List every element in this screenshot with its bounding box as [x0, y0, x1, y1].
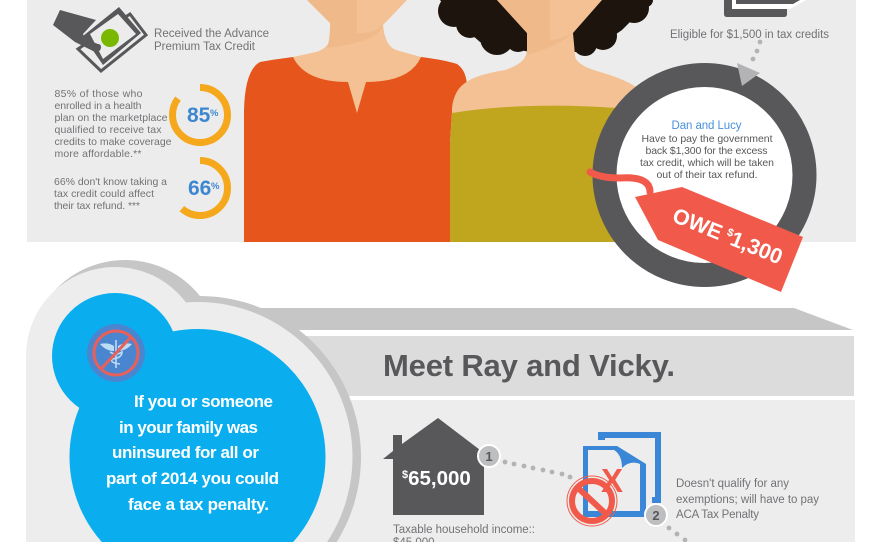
icon: rejected document: X — [601, 462, 623, 499]
panel: Dan and Lucy — [27, 0, 856, 242]
chart: 85 percent donut: % — [210, 108, 219, 119]
step 2 marker: 2 — [652, 508, 660, 523]
icon: house with income: 65,000 — [408, 467, 471, 490]
icon: house with income: $ — [402, 469, 408, 481]
text: 66 percent explanation: their tax refund. *** — [54, 200, 140, 212]
arrow: dotted connector to document — [503, 460, 572, 479]
text: 85 percent explanation: plan on the marketplace — [54, 112, 168, 124]
text: 85 percent explanation: credits to make coverage — [54, 136, 172, 148]
illustration: Lucy — [438, 0, 653, 242]
chart: 85 percent donut: 85 — [187, 104, 211, 127]
ring: amount owed — [604, 75, 804, 275]
tag: owe amount: $ — [725, 226, 735, 240]
text: penalty statement: face a tax penalty. — [128, 495, 269, 514]
text: 85 percent explanation — [54, 88, 172, 160]
text: Dan and Lucy callout — [640, 120, 774, 181]
panel: Ray and Vicky — [27, 400, 855, 542]
text: taxable income — [393, 524, 535, 542]
text: 66 percent explanation: 66% don't know taking a — [54, 176, 167, 188]
text: 85 percent explanation: enrolled in a health — [54, 100, 142, 112]
callout: uninsured penalty — [26, 260, 361, 542]
step 2 marker — [645, 504, 667, 526]
text: penalty statement: If you or someone — [134, 392, 273, 411]
banner: heading background — [280, 336, 854, 396]
icon: no medical insurance — [87, 324, 145, 382]
text: received credit — [154, 28, 269, 53]
chart: 66 percent donut: 66 — [188, 177, 211, 200]
text: Dan and Lucy callout: tax credit, which will be taken — [640, 157, 774, 169]
chart: 66 percent donut: % — [211, 181, 220, 192]
icon: document tray — [724, 0, 806, 17]
text: penalty statement: in your family was — [119, 418, 258, 437]
text: Dan and Lucy callout: back $1,300 for the excess — [646, 145, 768, 157]
text: 85 percent explanation: qualified to receive tax — [54, 124, 162, 136]
heading: Meet Ray and Vicky: Meet Ray and Vicky. — [383, 348, 675, 383]
text: received credit: Premium Tax Credit — [154, 41, 256, 53]
text: 85 percent explanation: 85% of those who — [54, 88, 143, 100]
text: Dan and Lucy callout: Have to pay the government — [642, 133, 773, 145]
tag: owe amount: 1,300 — [727, 227, 786, 269]
text: eligible for credits: Eligible for $1,500 in tax credits — [670, 29, 829, 41]
text: 66 percent explanation — [54, 176, 167, 212]
icon: ring arrowhead — [737, 63, 760, 86]
text: 66 percent explanation: tax credit could affect — [54, 188, 154, 200]
text: Dan and Lucy callout: out of their tax refund. — [656, 169, 758, 181]
illustration: Dan — [244, 0, 467, 242]
text: Dan and Lucy callout: Dan and Lucy — [672, 120, 742, 132]
text: penalty statement — [106, 392, 279, 514]
arrow: dotted connector onward — [667, 526, 687, 542]
step 1 marker: 1 — [485, 449, 493, 464]
text: 85 percent explanation: more affordable.** — [54, 148, 142, 160]
arrow: dotted connector to ring — [751, 40, 762, 61]
text: penalty statement: part of 2014 you could — [106, 469, 279, 488]
text: no exemptions: Doesn't qualify for any — [676, 478, 789, 490]
text: no exemptions: ACA Tax Penalty — [676, 509, 759, 521]
text: taxable income: Taxable household income:: — [393, 524, 535, 536]
text: penalty statement: uninsured for all or — [112, 443, 259, 462]
chart: 85 percent donut — [172, 88, 228, 142]
text: no exemptions: exemptions; will have to pay — [676, 494, 819, 506]
text: received credit: Received the Advance — [154, 28, 269, 40]
tag: owe amount — [590, 172, 803, 292]
icon: rejected document — [567, 432, 661, 526]
icon: house with income — [383, 418, 484, 515]
chart: 66 percent donut — [172, 160, 228, 216]
banner: top strip — [260, 308, 853, 330]
text: no exemptions — [676, 478, 819, 521]
step 1 marker — [478, 445, 500, 467]
tag: owe amount: OWE — [669, 203, 726, 245]
icon: hand holding money — [53, 7, 146, 71]
